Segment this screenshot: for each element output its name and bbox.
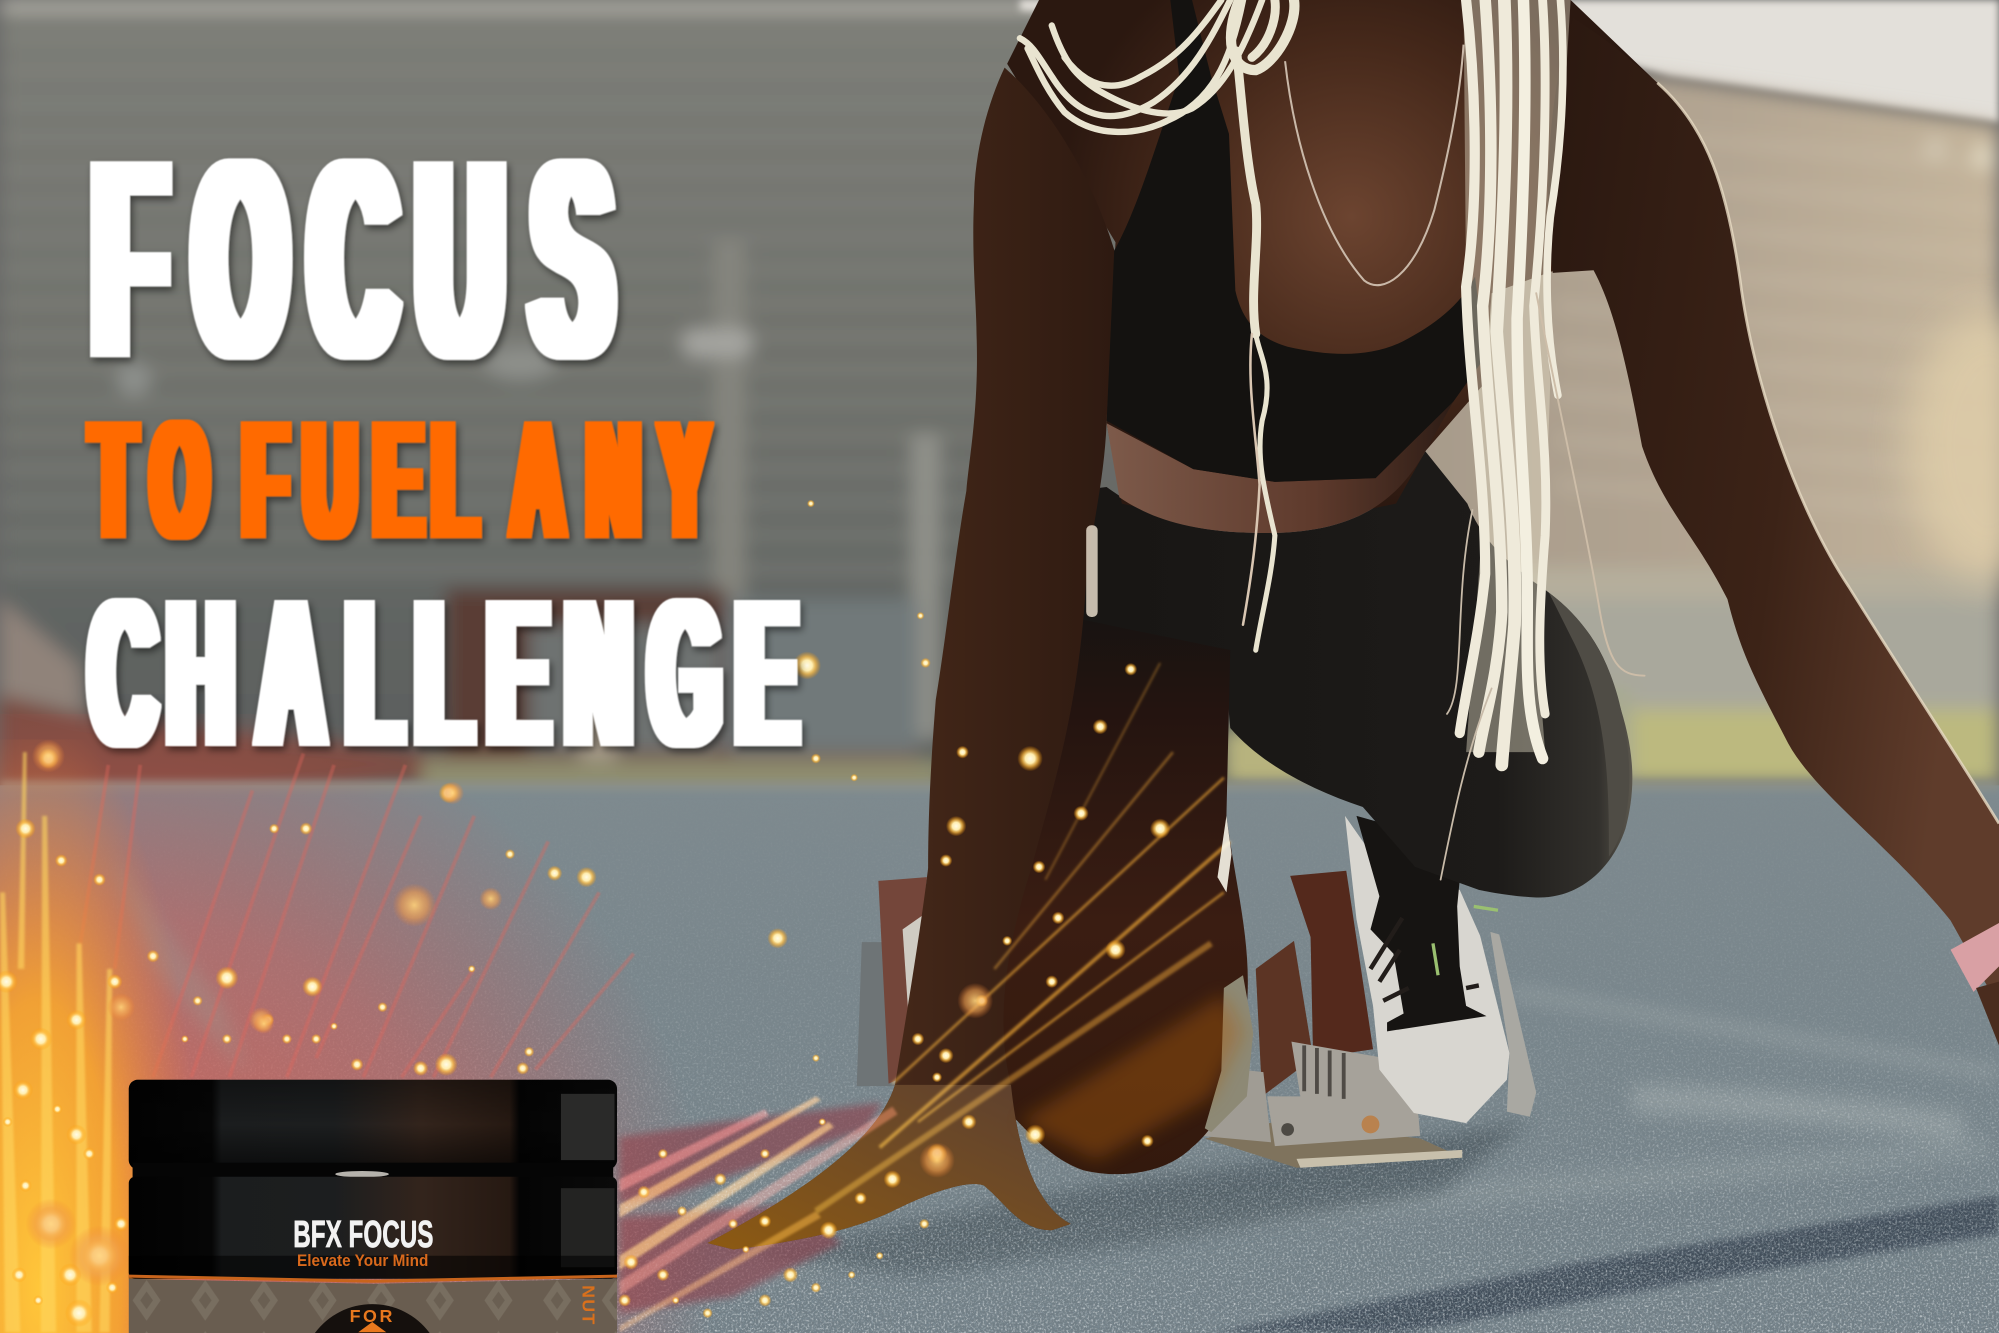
midriff <box>1107 402 1453 533</box>
torso skin <box>1007 0 1657 533</box>
headline line: TO FUEL ANY: TO FUEL ANY <box>92 389 708 573</box>
gold vertical rays <box>0 752 112 1332</box>
jar label <box>129 1276 617 1333</box>
pink fine rays <box>76 753 634 1077</box>
right arm <box>1548 18 1999 1007</box>
sparks <box>0 500 1170 1327</box>
warm flare over leg <box>1020 994 1243 1160</box>
leggings thigh <box>956 451 1632 898</box>
rim light on right arm <box>1657 83 1999 824</box>
jar logo badge <box>315 1304 430 1333</box>
sky <box>1020 0 1999 122</box>
front block plate <box>1290 871 1373 1058</box>
necklace <box>1285 45 1464 285</box>
metal frame <box>1205 1122 1462 1168</box>
jar body <box>129 1177 617 1279</box>
streaks over arm and leg <box>816 663 1230 1211</box>
textured shoe tip <box>1205 975 1253 1132</box>
vertical label text: NUT <box>579 1285 599 1326</box>
left hair loops <box>1020 0 1294 650</box>
jar tagline: Elevate Your Mind <box>297 1251 428 1270</box>
sun glow on right stands <box>1906 312 1999 580</box>
gold column <box>0 739 217 1333</box>
hair braids <box>1020 0 1645 880</box>
stadium stands left <box>0 0 1249 829</box>
headline <box>90 102 796 789</box>
grey diagonal streak <box>108 852 249 1077</box>
headline word: FOCUS: FOCUS <box>94 102 611 416</box>
running track <box>0 785 1999 1333</box>
athlete <box>708 0 1999 1249</box>
rear block plate <box>857 942 898 1086</box>
jar neck groove <box>133 1163 613 1182</box>
pink tinted shadow patches <box>620 1103 882 1313</box>
right hair bundle <box>1464 0 1571 752</box>
orange rays right of jar <box>620 1096 898 1332</box>
spark burst and light rays <box>0 500 1243 1333</box>
shoe <box>1345 816 1509 1123</box>
stadium stands right <box>1224 51 1999 785</box>
front leg <box>969 612 1248 1174</box>
white knee gap <box>1218 816 1232 892</box>
left arm and hand <box>708 68 1114 1249</box>
product jar <box>129 1080 617 1333</box>
diagonal shadow <box>1214 1196 1999 1333</box>
jar lid <box>129 1080 617 1169</box>
body shadow on track <box>739 1122 1530 1275</box>
jar product name: BFX FOCUS <box>293 1213 433 1256</box>
wrist band <box>1951 923 1999 1045</box>
sports bra <box>1107 0 1485 482</box>
lit knee edge of leggings <box>1549 593 1629 857</box>
jar logo badge: FOR <box>350 1306 395 1326</box>
red haze <box>0 714 790 1333</box>
starting blocks <box>857 871 1462 1168</box>
side spike plate <box>1490 932 1536 1117</box>
headline word: CHALLENGE: CHALLENGE <box>90 556 796 789</box>
track grain <box>182 907 1999 1333</box>
track lines <box>714 992 1999 1275</box>
large glow spots <box>26 739 993 1286</box>
shoe ankle and laces <box>1356 816 1486 1031</box>
